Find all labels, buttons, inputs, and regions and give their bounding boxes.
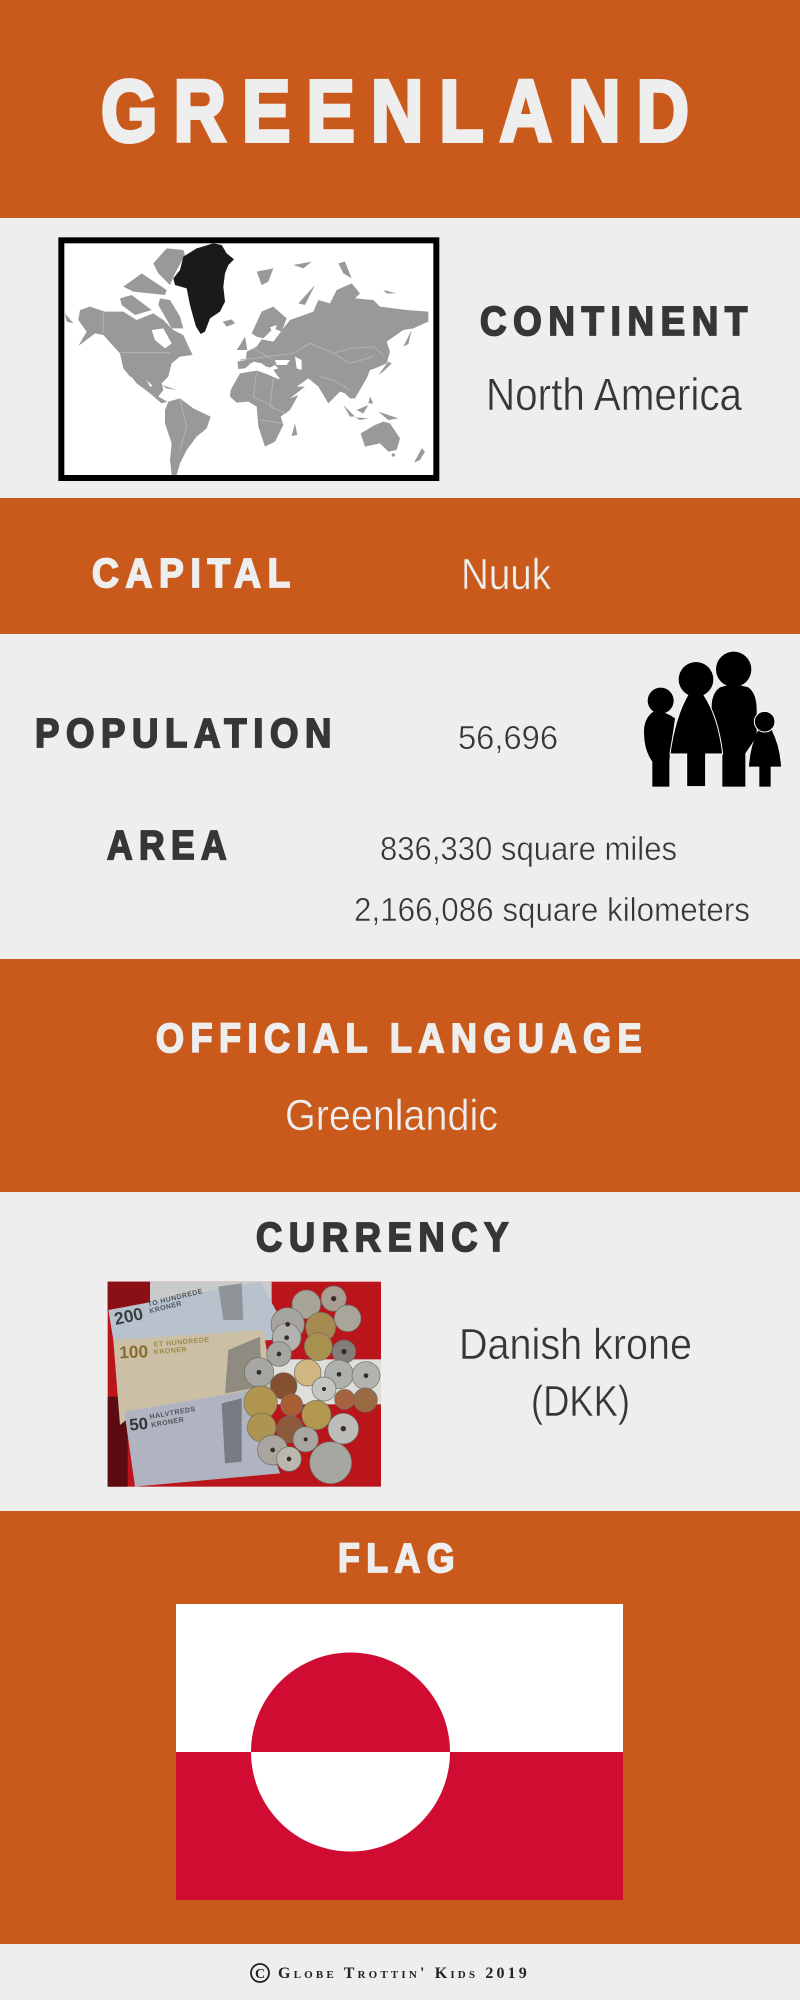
language value: Greenlandic (285, 1091, 498, 1140)
continent value: North America (486, 369, 743, 420)
photo: banknotes and coins: 50 (128, 1414, 149, 1435)
language heading: OFFICIAL LANGUAGE (156, 1015, 648, 1061)
icon: family (644, 652, 781, 787)
panel: currency (0, 1192, 800, 1511)
panel: official language (0, 959, 800, 1192)
capital value: Nuuk (461, 550, 552, 599)
world map with Greenland highlighted (61, 240, 436, 478)
panel: footer credit (0, 1944, 800, 2000)
panel: capital (0, 498, 800, 634)
continent heading: CONTINENT (480, 298, 754, 344)
photo: banknotes and coins: ET HUNDREDE (154, 1337, 210, 1349)
photo: banknotes and coins: 100 (119, 1341, 148, 1362)
flag heading: FLAG (338, 1535, 461, 1581)
icon: copyright (251, 1964, 269, 1982)
icon: copyright: C (255, 1967, 265, 1982)
population value: 56,696 (458, 719, 558, 756)
area heading: AREA (107, 822, 233, 868)
photo: banknotes and coins: KRONER (154, 1346, 187, 1356)
currency value line 1: Danish krone (459, 1320, 692, 1369)
photo: banknotes and coins: KRONER (151, 1417, 185, 1429)
photo: banknotes and coins: TO HUNDREDE (147, 1288, 204, 1309)
population heading: POPULATION (35, 710, 338, 756)
currency value line 2: (DKK) (531, 1377, 630, 1426)
area in square miles: 836,330 square miles (380, 830, 677, 867)
panel: flag (0, 1511, 800, 1944)
area in square kilometers: 2,166,086 square kilometers (354, 891, 750, 928)
photo: banknotes and coins: 200 (112, 1303, 145, 1329)
panel: title band (0, 0, 800, 218)
photo: banknotes and coins: HALVTREDS (149, 1406, 196, 1421)
credit text: Globe Trottin' Kids 2019 (278, 1965, 530, 1982)
currency heading: CURRENCY (256, 1214, 515, 1260)
panel: population and area (0, 634, 800, 959)
Greenland (173, 243, 234, 334)
flag of Greenland (176, 1604, 623, 1900)
panel: continent (0, 218, 800, 498)
capital heading: CAPITAL (92, 550, 297, 596)
photo: banknotes and coins (108, 1282, 381, 1487)
photo: banknotes and coins: KRONER (149, 1300, 183, 1315)
